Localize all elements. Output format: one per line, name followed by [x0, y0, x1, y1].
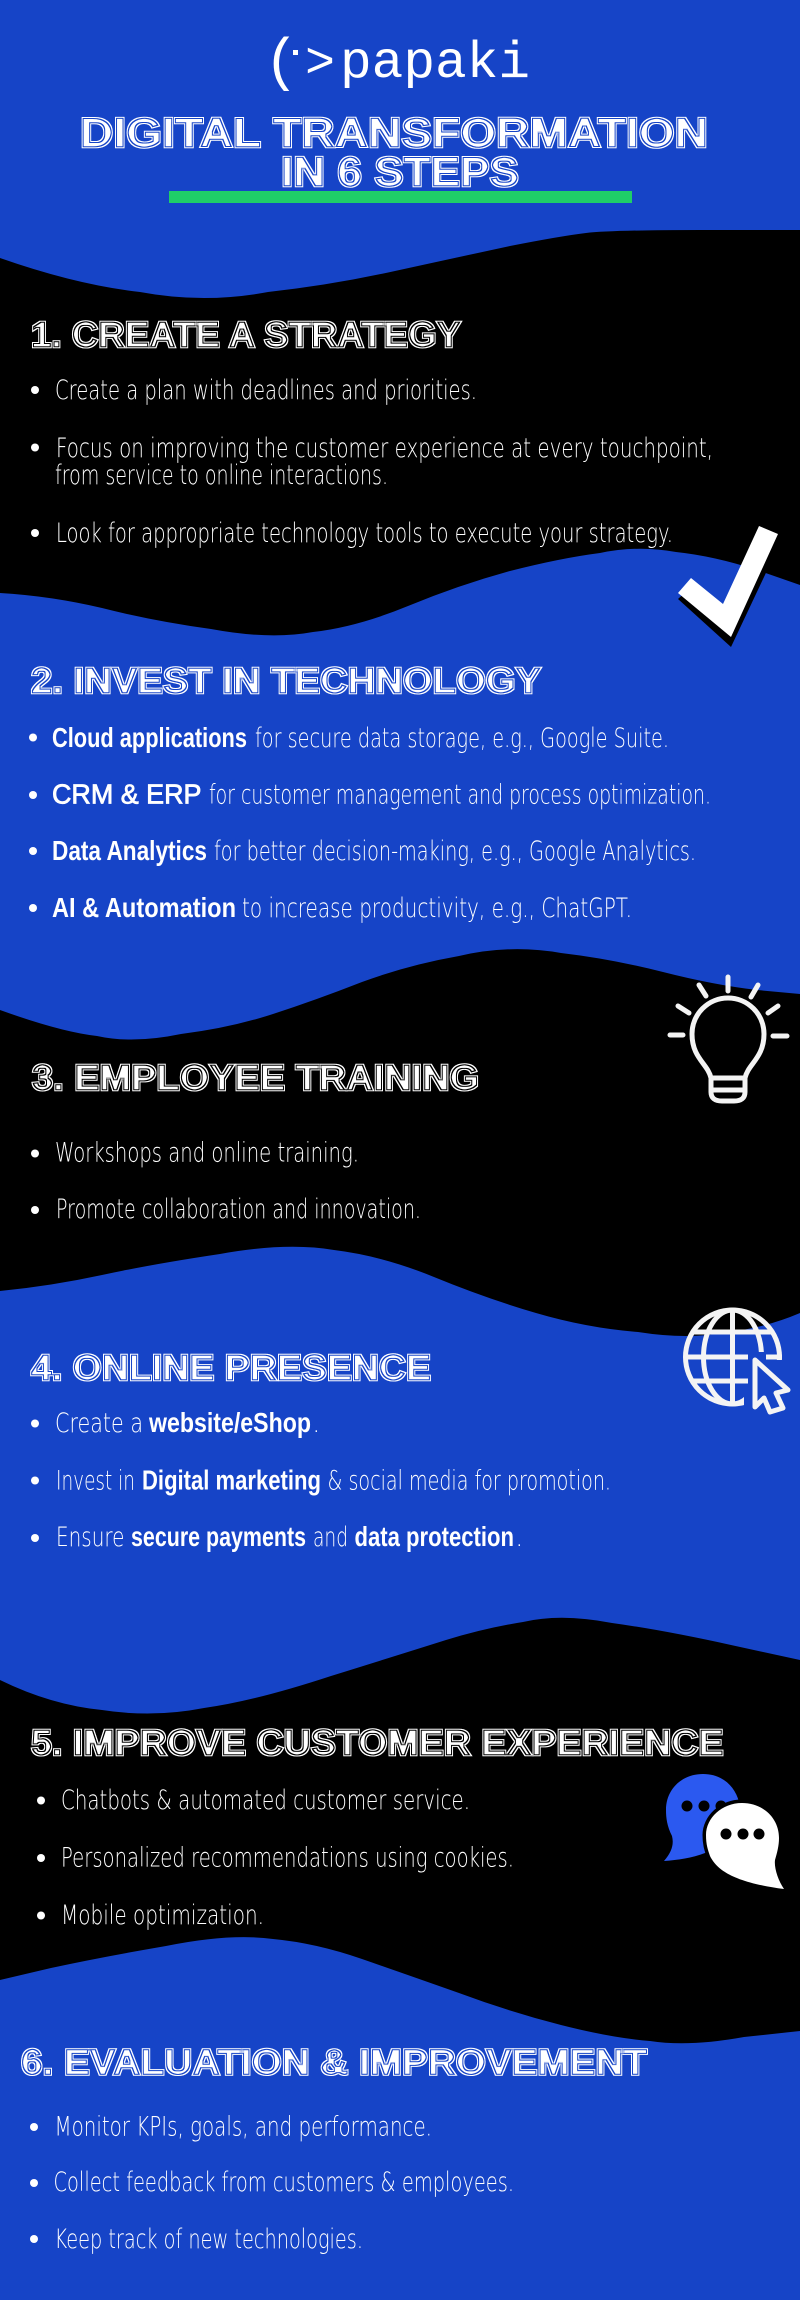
list: step 5 bullets: Mobile optimization. [61, 1900, 264, 1931]
title: IN 6 STEPS [281, 148, 519, 195]
list: step 6 bullets: Keep track of new technologies. [54, 2224, 363, 2255]
list: step 1 bullets: from service to online interactions. [55, 460, 388, 491]
heading: step 1: 1. CREATE A STRATEGY [31, 314, 461, 355]
icon: check mark [678, 526, 780, 647]
list: step 4 bullets: Ensure [56, 1522, 124, 1553]
list: step 4 bullets: secure payments [131, 1521, 306, 1552]
logo: papaki: > [305, 36, 335, 93]
list: step 3 bullets: Workshops and online training. [55, 1138, 359, 1168]
list: step 2 bullets [29, 722, 711, 924]
list: step 4 bullets: and [313, 1522, 348, 1553]
list: step 4 bullets: & social media for promotion. [328, 1466, 611, 1496]
heading: step 6: 6. EVALUATION & IMPROVEMENT [21, 2042, 647, 2082]
list: step 1 bullets [31, 375, 713, 549]
list: step 2 bullets: AI & Automation [52, 892, 236, 923]
heading: step 2: 2. INVEST IN TECHNOLOGY [31, 660, 541, 701]
wave: blue band 2 [0, 549, 800, 2300]
panel: step 3 employee training [31, 1057, 479, 1225]
panel: step 5 improve customer experience [31, 1722, 723, 1931]
panel: step 4 online presence [31, 1347, 611, 1553]
list: step 4 bullets: Invest in [56, 1466, 135, 1496]
panel: step 6 evaluation and improvement [21, 2042, 647, 2255]
heading: step 4: 4. ONLINE PRESENCE [31, 1347, 431, 1388]
list: step 2 bullets: CRM & ERP [52, 778, 202, 810]
list: step 3 bullets: Promote collaboration and innovation. [56, 1194, 421, 1225]
wave: blue band 4 [0, 1247, 800, 2300]
heading: step 3: 3. EMPLOYEE TRAINING [32, 1057, 479, 1098]
icon: light bulb [670, 977, 787, 1101]
wave: black band 5 [0, 1618, 800, 2300]
title [80, 109, 708, 195]
panel: step 2 invest in technology [29, 660, 711, 924]
logo: papaki [264, 32, 530, 97]
title underline: green bar [169, 191, 632, 203]
list: step 2 bullets: Data Analytics [52, 835, 207, 866]
title: DIGITAL TRANSFORMATION [80, 109, 708, 156]
list: step 4 bullets [31, 1407, 611, 1553]
heading: step 5: 5. IMPROVE CUSTOMER EXPERIENCE [31, 1722, 723, 1763]
list: step 6 bullets: Collect feedback from customers & employees. [54, 2167, 514, 2198]
logo: papaki: ( [264, 32, 299, 97]
list: step 3 bullets [31, 1138, 421, 1225]
list: step 4 bullets: . [515, 1522, 524, 1553]
list: step 4 bullets: data protection [354, 1521, 514, 1552]
icon: chat bubbles [664, 1774, 784, 1889]
wave: black band 3 [0, 949, 800, 2300]
list: step 2 bullets: to increase productivity, e.g., ChatGPT. [242, 893, 632, 924]
list: step 4 bullets: Digital marketing [142, 1464, 321, 1496]
list: step 5 bullets [37, 1785, 514, 1931]
panel: step 1 create a strategy [31, 314, 713, 549]
list: step 4 bullets: Create a [55, 1408, 143, 1439]
list: step 5 bullets: Personalized recommendations using cookies. [61, 1842, 514, 1874]
list: step 6 bullets [30, 2112, 514, 2255]
icon: globe with cursor [686, 1310, 792, 1420]
logo: papaki: papaki [340, 34, 530, 93]
wave: blue band 6 [0, 1937, 800, 2300]
list: step 4 bullets: . [312, 1408, 321, 1439]
list: step 4 bullets: website/eShop [148, 1407, 311, 1438]
list: step 5 bullets: Chatbots & automated customer service. [61, 1785, 470, 1816]
list: step 1 bullets: Create a plan with deadlines and priorities. [55, 375, 477, 406]
list: step 6 bullets: Monitor KPIs, goals, and performance. [54, 2112, 432, 2142]
list: step 2 bullets: Cloud applications [52, 722, 247, 753]
